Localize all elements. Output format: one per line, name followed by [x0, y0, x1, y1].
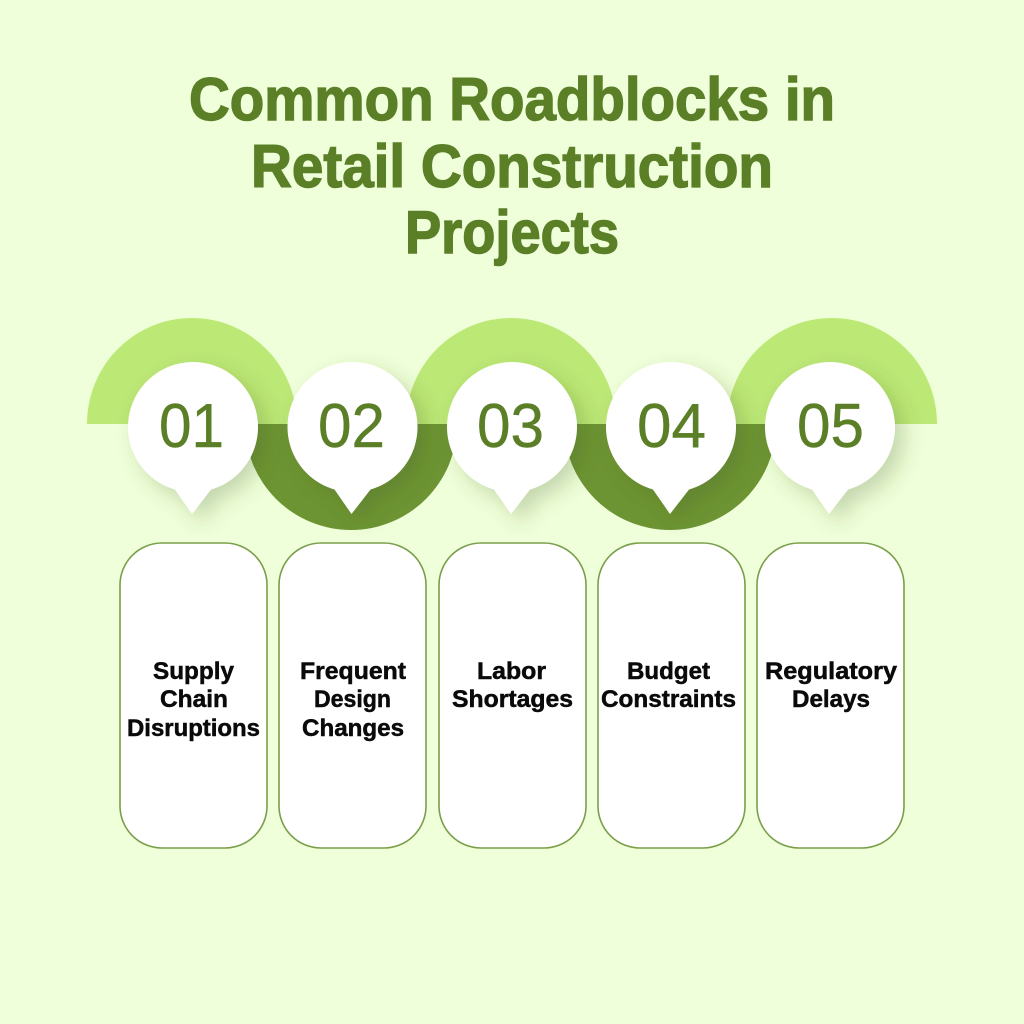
- marker 04: 04: [637, 392, 706, 461]
- card 2: frequent design changes: [279, 543, 426, 848]
- title: Retail Construction: [251, 133, 773, 200]
- marker 02: [288, 362, 417, 514]
- marker 03: [447, 362, 577, 514]
- title: Common Roadblocks in: [189, 66, 835, 133]
- card 3: labor shortages: Labor: [477, 658, 546, 685]
- card 1: supply chain disruptions: Chain: [160, 686, 228, 713]
- card 1: supply chain disruptions: Disruptions: [127, 715, 260, 742]
- card 1: supply chain disruptions: [120, 543, 267, 848]
- card 3: labor shortages: [439, 543, 586, 848]
- marker 05: [765, 362, 895, 514]
- marker 04: [606, 362, 736, 514]
- card 5: regulatory delays: Delays: [792, 686, 870, 713]
- card 2: frequent design changes: Design: [314, 686, 391, 713]
- card 5: regulatory delays: Regulatory: [765, 658, 898, 685]
- card 4: budget constraints: Budget: [627, 658, 710, 685]
- marker 05: 05: [797, 392, 864, 461]
- card 5: regulatory delays: [757, 543, 904, 848]
- marker 01: [128, 362, 258, 514]
- title: [189, 66, 835, 266]
- wave ribbon: [87, 318, 937, 530]
- card 3: labor shortages: Shortages: [452, 686, 573, 713]
- card 2: frequent design changes: Changes: [302, 715, 404, 742]
- card 4: budget constraints: [598, 543, 745, 848]
- marker 03: 03: [477, 392, 544, 461]
- marker 02: 02: [318, 392, 385, 461]
- title: Projects: [405, 199, 619, 266]
- marker 01: 01: [159, 392, 224, 461]
- card 2: frequent design changes: Frequent: [300, 658, 406, 685]
- card 4: budget constraints: Constraints: [601, 686, 736, 713]
- card 1: supply chain disruptions: Supply: [153, 658, 235, 685]
